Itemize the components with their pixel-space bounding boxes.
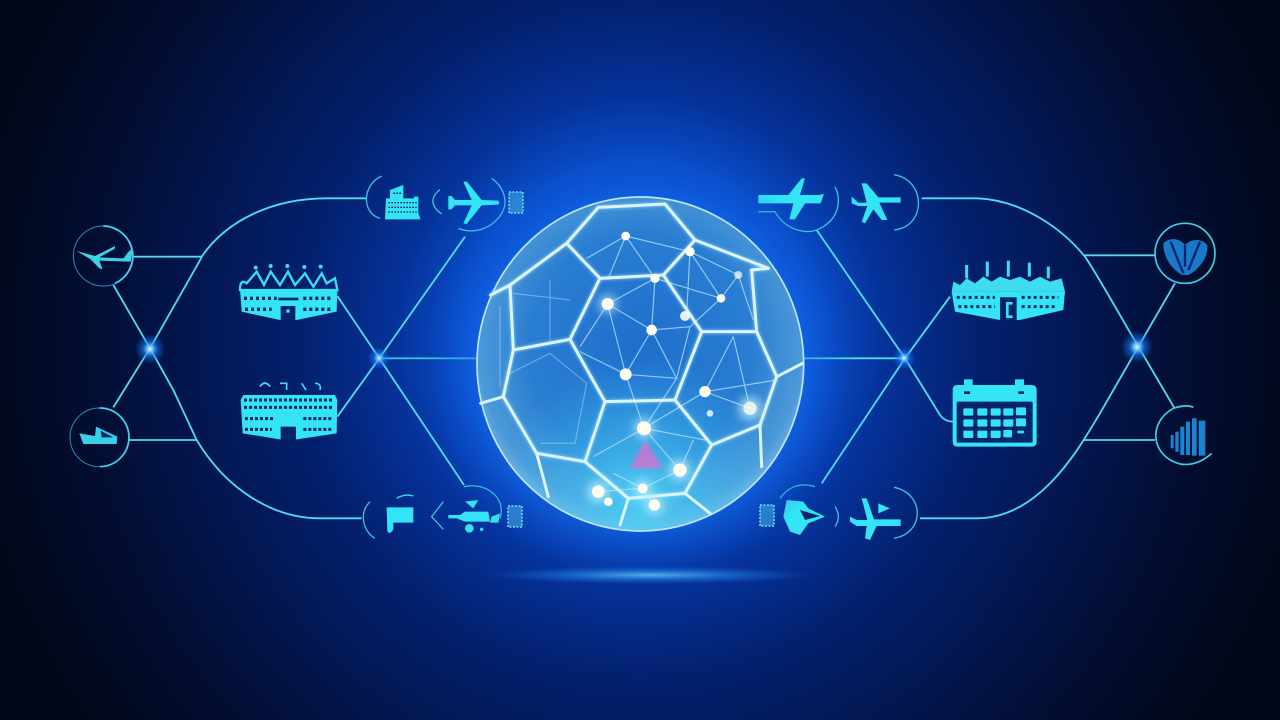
icon: calendar [953,379,1037,447]
icon: bottom scroll tower [363,495,443,538]
soccer ball [476,196,804,532]
icon: right bar chart in circle [1156,406,1212,464]
node glows [588,295,761,514]
floor reflection [485,566,815,584]
icon: far-left airplane in circle [73,226,133,286]
icon: top hotel building [366,176,442,219]
ball halo [426,149,856,579]
left icons [70,176,505,538]
ball body [476,196,804,532]
tiny building glyphs beside the ball [508,192,774,527]
panel seam glow [491,204,777,498]
left network lines [113,198,498,518]
inner network mesh [500,236,777,505]
icon: stadium with roof [241,383,337,441]
icon: stadium with fans [952,261,1065,321]
icon: top outer airplane [852,175,918,230]
glowing network nodes [592,232,757,511]
right icons [758,175,1215,540]
icon: bottom outer airplane [850,487,917,540]
icon: bottom aircraft cluster [448,486,501,533]
icon: stadium with crowd [240,264,337,321]
right network lines [803,198,1175,518]
network junction glows [135,331,1153,369]
pink lens flare [630,440,663,468]
icon: bottom inner trophy cluster [780,485,838,535]
icon: top airplane [448,178,505,231]
icon: top inner airplane [758,178,838,232]
panel seams [481,204,803,525]
icon: right leaf emblem in circle [1155,223,1215,283]
icon: far-left ship in circle [70,408,129,467]
